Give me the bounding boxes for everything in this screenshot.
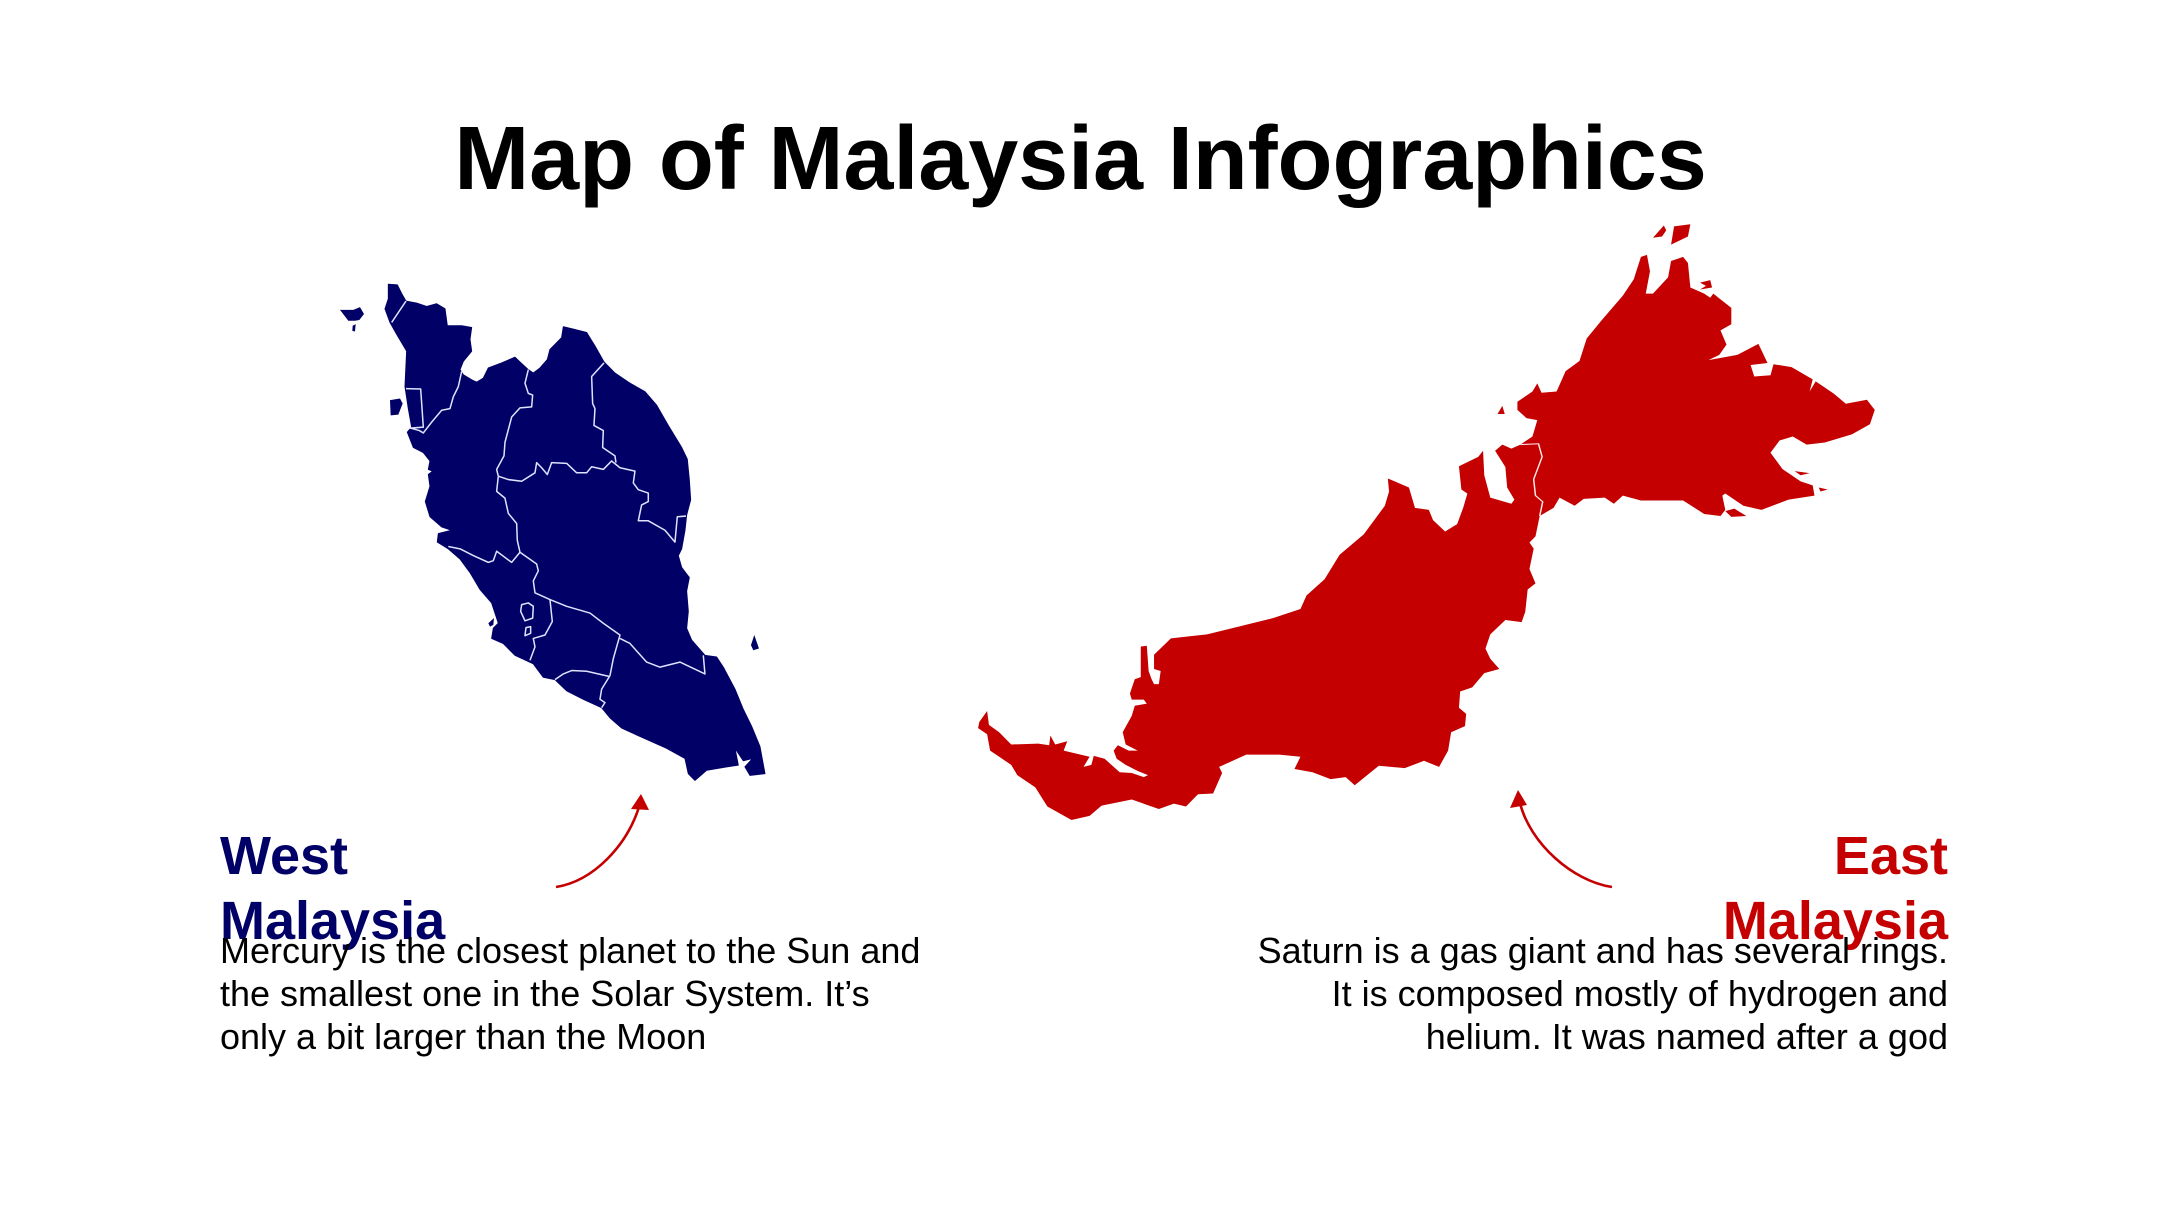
text: West Malaysia description: only a bit larger than the Moon: [220, 1016, 706, 1057]
text: West Malaysia description: the smallest one in the Solar System. It’s: [220, 973, 870, 1014]
islands: [340, 307, 759, 650]
Sarawak and Sabah landmass: [978, 255, 1875, 820]
state border: [1520, 444, 1543, 516]
text: East Malaysia description: helium. It was named after a god: [1426, 1016, 1948, 1057]
heading: West Malaysia: [220, 826, 446, 951]
peninsula landmass: [385, 284, 765, 780]
map: West Malaysia: [340, 284, 765, 780]
text: East Malaysia description: Saturn is a gas giant and has several rings.: [1258, 930, 1948, 971]
text: East Malaysia description: It is composed mostly of hydrogen and: [1332, 973, 1948, 1014]
state borders: [392, 301, 705, 708]
map: East Malaysia: [978, 224, 1875, 820]
heading: East Malaysia: East: [1834, 826, 1948, 886]
title: Map of Malaysia Infographics: [454, 109, 1707, 209]
heading: West Malaysia: Malaysia: [220, 891, 445, 951]
text: West Malaysia description: [220, 930, 920, 1057]
arrow: to West Malaysia: [556, 794, 649, 887]
heading: East Malaysia: Malaysia: [1723, 891, 1948, 951]
heading: East Malaysia: [1723, 826, 1948, 951]
text: West Malaysia description: Mercury is the closest planet to the Sun and: [220, 930, 920, 971]
arrow: to East Malaysia: [1510, 790, 1612, 887]
heading: West Malaysia: West: [220, 826, 348, 886]
text: East Malaysia description: [1258, 930, 1948, 1057]
islands: [1498, 224, 1828, 517]
